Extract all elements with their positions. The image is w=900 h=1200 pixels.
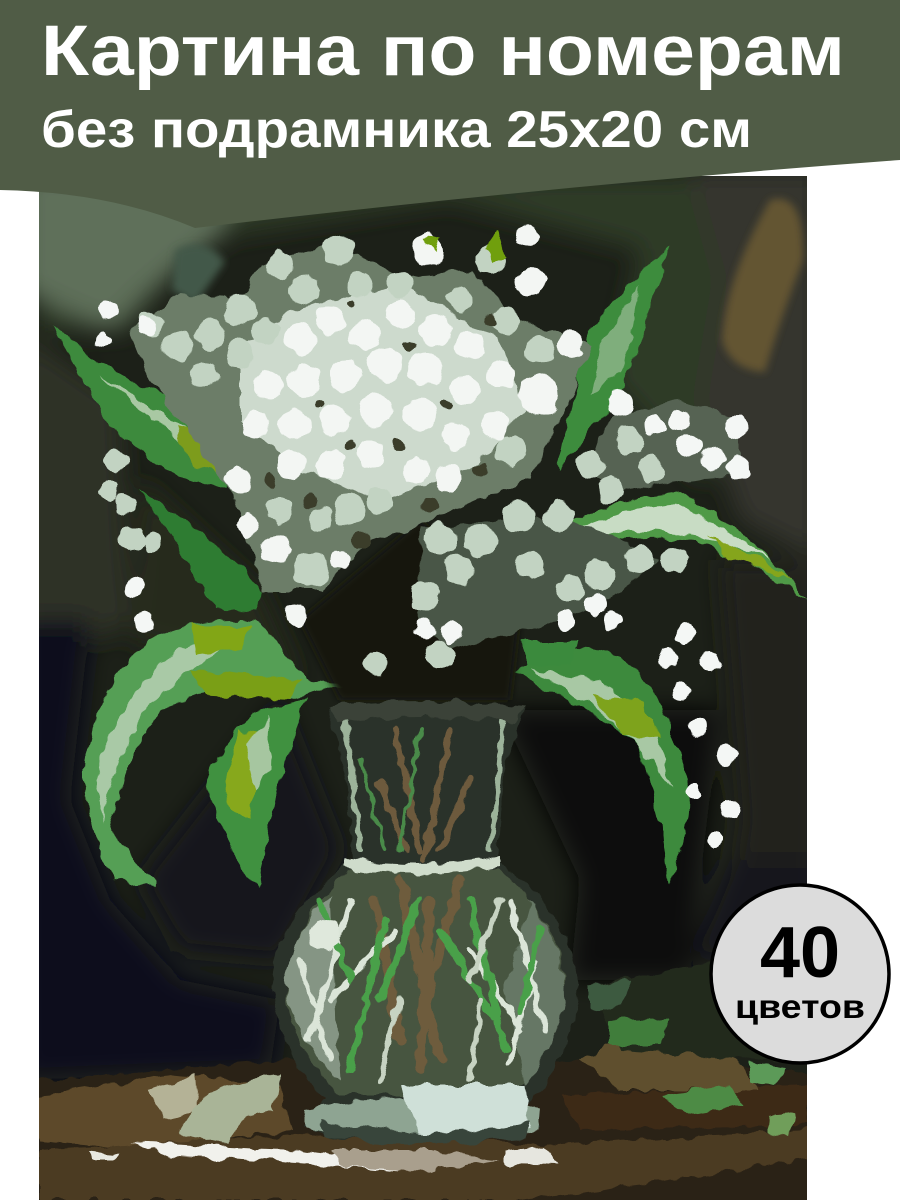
painting: lily of the valley in a glass vase (20, 170, 820, 1200)
table white highlights (130, 1142, 400, 1172)
leaf: dark stem left (140, 490, 265, 612)
flower dots green-grey (100, 235, 688, 677)
vase neck rim (328, 700, 525, 722)
badge: 40 colours (711, 885, 889, 1063)
vase body (272, 708, 578, 1140)
leaf: upper right (558, 245, 670, 470)
flower mass shading (130, 245, 590, 590)
leaf: lower left large (84, 619, 345, 885)
vase base (305, 1097, 540, 1140)
badge number: 40 (760, 913, 840, 993)
green patch top left (172, 245, 225, 305)
table (20, 960, 820, 1200)
badge circle (711, 885, 889, 1063)
badge label: цветов (735, 988, 865, 1025)
leaf: upper left (55, 325, 245, 490)
leaf: large arc right (572, 491, 807, 600)
flower green buds (484, 230, 506, 262)
brown patch top right (722, 199, 803, 372)
subtitle: без подрамника 25х20 см (41, 101, 752, 159)
leaves (55, 245, 807, 890)
leaf: lower right (515, 648, 690, 885)
vase stems (300, 715, 545, 1080)
flower dots bright small (96, 301, 749, 848)
painting background (39, 176, 807, 1082)
leaf: lower left small (207, 700, 305, 890)
vase collar (345, 856, 500, 874)
header banner (0, 0, 900, 228)
vase (272, 700, 578, 1144)
flowers (96, 224, 749, 848)
flower dots main cluster (225, 224, 583, 628)
flower dark gaps (264, 301, 496, 549)
title: Картина по номерам (41, 12, 845, 91)
dark bouquet centre (300, 520, 520, 700)
